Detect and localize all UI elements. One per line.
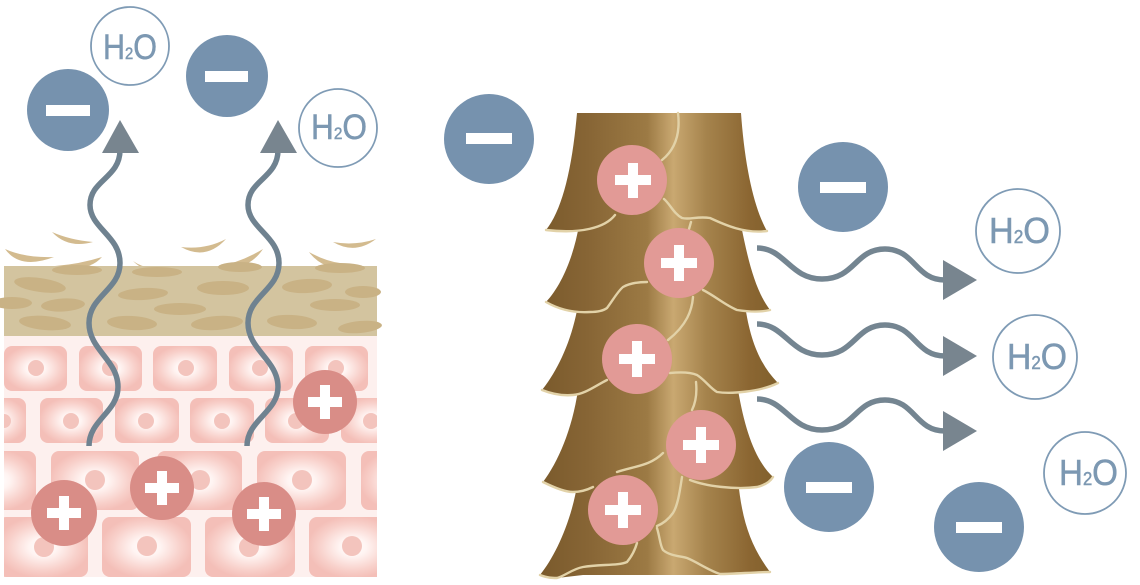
negative ion, upper right of hair bbox=[798, 142, 888, 232]
arrow: water leaving skin, right bbox=[247, 120, 297, 446]
negative ion, bottom right bbox=[934, 482, 1024, 572]
hair cuticle scale 5 bbox=[540, 480, 770, 578]
arrow: water leaving skin, left bbox=[89, 120, 139, 446]
panel: hair shaft bbox=[444, 94, 1126, 578]
water molecule, left: H2O bbox=[103, 28, 157, 67]
water molecule, top: H2O bbox=[989, 210, 1050, 251]
negative ion, left bbox=[27, 69, 109, 151]
positive ions in skin bbox=[31, 370, 357, 546]
outer skin layer bbox=[0, 262, 382, 336]
negative ion, upper left of hair bbox=[444, 94, 534, 184]
negative ion, lower right of hair bbox=[784, 442, 874, 532]
arrow: water leaving hair, middle bbox=[757, 324, 977, 376]
water molecule, right: H2O bbox=[311, 108, 367, 147]
negative ion, right bbox=[186, 35, 268, 117]
water molecule, middle bbox=[993, 315, 1077, 399]
water molecule, middle: H2O bbox=[1007, 336, 1067, 377]
water molecule, right bbox=[299, 89, 377, 167]
positive ions on hair bbox=[588, 145, 736, 545]
arrow: water leaving hair, top bbox=[757, 248, 977, 300]
water molecule, bottom bbox=[1044, 432, 1126, 514]
water molecule, top bbox=[976, 189, 1060, 273]
hair cuticle crack lines bbox=[540, 113, 778, 578]
hair cuticle scale 2 bbox=[546, 225, 770, 312]
water molecule, bottom: H2O bbox=[1059, 452, 1118, 493]
panel: skin cross-section bbox=[0, 6, 382, 577]
arrow: water leaving hair, bottom bbox=[757, 399, 977, 451]
hair trunk behind scales bbox=[582, 150, 735, 562]
inner skin cells bbox=[4, 336, 377, 577]
water molecule, left bbox=[91, 7, 169, 85]
hair cuticle scale 1 bbox=[546, 113, 767, 232]
hair cuticle scale 4 bbox=[543, 390, 773, 492]
hair cuticle scale 3 bbox=[542, 305, 778, 395]
surface skin flakes bbox=[5, 232, 376, 274]
